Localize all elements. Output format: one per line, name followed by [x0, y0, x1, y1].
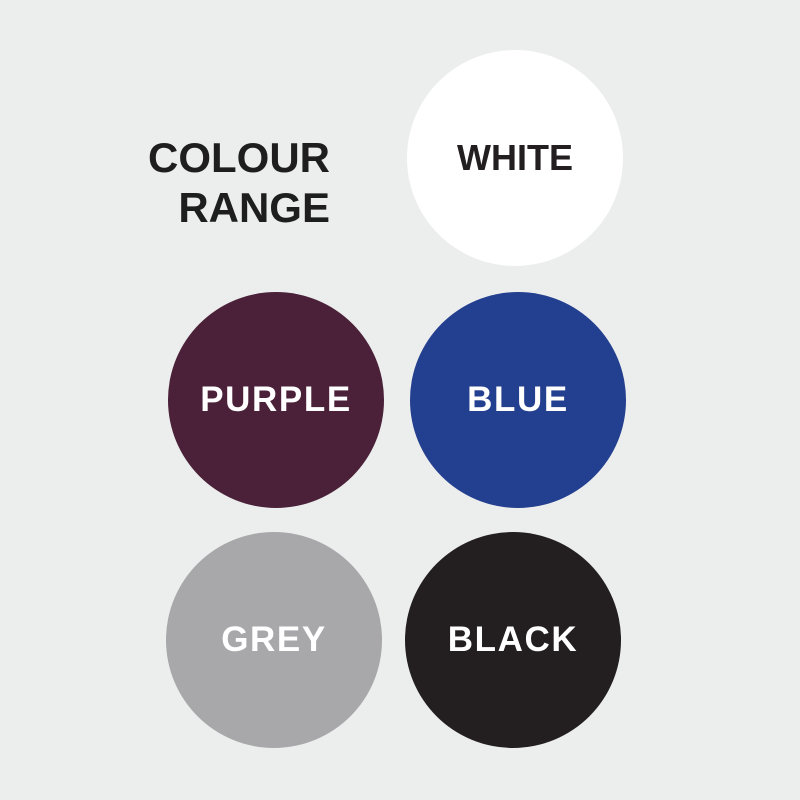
- circle: purple: [168, 292, 384, 508]
- circle: grey: [166, 532, 382, 748]
- title: [148, 134, 330, 231]
- circle: black: [405, 532, 621, 748]
- title: COLOUR: [148, 134, 330, 181]
- circle: white: WHITE: [457, 137, 573, 178]
- circle: white: [407, 50, 623, 266]
- circle: blue: BLUE: [467, 380, 569, 419]
- circle: black: BLACK: [448, 620, 578, 659]
- circle: grey: GREY: [221, 620, 327, 659]
- circle: blue: [410, 292, 626, 508]
- circle: purple: PURPLE: [200, 380, 352, 419]
- title: RANGE: [178, 184, 330, 231]
